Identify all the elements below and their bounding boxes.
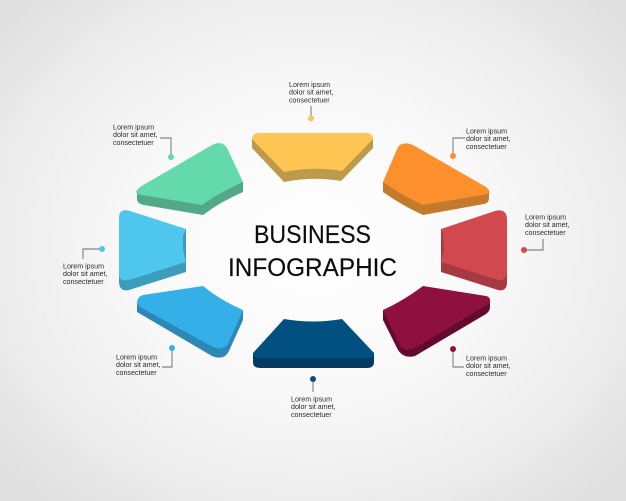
label: bottom: dolor sit amet, [291,403,336,411]
label: right: Lorem ipsum [525,214,566,222]
segment: yellow [252,133,373,182]
label: left: Lorem ipsum [63,262,104,270]
label: top: Lorem ipsum [289,81,330,89]
label: bottom left: dolor sit amet, [116,361,161,369]
label: top left: dolor sit amet, [113,131,158,139]
label: left: dolor sit amet, [63,270,108,278]
label: bottom right: Lorem ipsum [466,354,507,362]
label: top left: consectetuer [113,139,154,147]
label: bottom right [450,346,511,378]
label: top right [450,128,511,159]
segment: red [441,210,507,290]
label: top right: Lorem ipsum [466,128,507,136]
label: bottom left [116,345,175,377]
title: INFOGRAPHIC [228,254,397,282]
label: top left [113,124,174,160]
segment: light blue [119,210,186,290]
label: top right: consectetuer [466,143,507,151]
label: top: consectetuer [289,96,330,104]
label: bottom right: dolor sit amet, [466,362,511,370]
segment: orange [383,143,489,215]
segment: navy [253,319,374,368]
label: bottom [291,376,336,419]
label: bottom left: consectetuer [116,369,157,377]
label: right [521,214,570,253]
title [228,221,397,282]
label: bottom: consectetuer [291,411,332,419]
label: top right: dolor sit amet, [466,135,511,143]
label: bottom: Lorem ipsum [291,396,332,404]
segment: green [136,143,243,215]
label: top [289,81,334,122]
title: BUSINESS [254,221,371,249]
label: right: consectetuer [525,229,566,237]
label: top: dolor sit amet, [289,89,334,97]
segment: maroon [383,286,490,357]
label: left [63,246,108,286]
label: top left: Lorem ipsum [113,124,154,132]
segment: blue [137,286,243,358]
label: bottom right: consectetuer [466,370,507,378]
label: left: consectetuer [63,278,104,286]
label: right: dolor sit amet, [525,221,570,229]
label: bottom left: Lorem ipsum [116,354,157,362]
